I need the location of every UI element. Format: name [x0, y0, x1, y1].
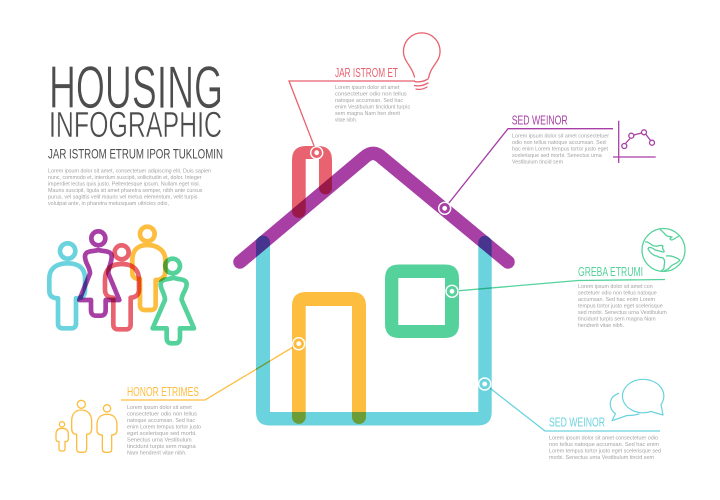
house walls [256, 236, 492, 426]
body text: Senectus urna Vestibulum [127, 438, 192, 444]
title: HOUSING [49, 54, 223, 121]
body text: enim Vestibulum tincidunt turpis [335, 104, 410, 110]
body text: Nam hendrerit vitae nibh. [127, 450, 187, 456]
callout: purple [512, 114, 656, 165]
body text: natoque accumsan. Sed hac [127, 418, 195, 424]
title [49, 54, 223, 145]
heading: SED WEINOR [512, 114, 568, 128]
callout: cyan [549, 379, 664, 461]
marker: window [446, 285, 458, 297]
leader line: window [452, 280, 665, 291]
heading: SED WEINOR [549, 416, 605, 430]
body text: accumsan. Sed hac enim Lorem [578, 297, 655, 303]
body text: odio non tellus natoque accumsan. Sed [512, 140, 606, 146]
body text: sectetuer odio non tellus natoque [578, 290, 657, 296]
intro text block: purus, vel sagittis velit mauris vel metus elementum, velit turpis [48, 194, 198, 200]
body text: eget scelerisque sed morbi. [127, 431, 197, 437]
body text: Lorem ipsum dolor sit amet [127, 405, 192, 411]
intro text block: Lorem ipsum dolor sit amet, consectetuer adipiscing elit. Duis sapien [48, 168, 211, 174]
body text: scelerisque sed morbi. Senectus urna [512, 153, 602, 159]
marker: roof [439, 202, 451, 214]
intro text block: imperdiet lectus quis justo. Pellentesque ipsum. Nullam eget nisl. [48, 182, 200, 188]
intro text block [48, 168, 211, 207]
body text: Lorem ipsum dolor sit amet consectetuer [512, 133, 609, 139]
chimney [292, 146, 332, 218]
door [292, 292, 366, 424]
body text: tincidunt turpis sem magna [127, 444, 196, 450]
subtitle: JAR ISTROM ETRUM IPOR TUKLOMIN [48, 146, 223, 162]
person: red man [105, 245, 139, 329]
icon: family [56, 400, 117, 452]
icon: speech bubbles [610, 379, 664, 421]
marker: wall [479, 378, 491, 390]
callout: red [335, 33, 440, 123]
icon: globe [642, 228, 685, 272]
body text: consectetuer odio non tellus [127, 412, 197, 418]
house illustration [240, 146, 508, 426]
body text: morbi. Senectus urna Vestibulum tincid sem [549, 455, 655, 461]
intro text block: nunc, commodo et, interdum suscipit, sollicitudin et, dolor. Integer [48, 175, 202, 181]
leader line: chimney [289, 81, 415, 153]
body text: Lorem ipsum dolor sit amet consectetuer odio [549, 436, 658, 442]
person: yellow man [132, 227, 165, 310]
body text: Vestibulum tincid sem [512, 159, 563, 165]
body text: consectetuer odio non tellus [335, 92, 407, 98]
body text: tempus tortor justo eget scelerisque [578, 304, 663, 310]
leader line: wall [485, 384, 660, 431]
body text: non tellus natoque accumsan. Sed hac enim [549, 442, 660, 448]
intro text block: Mauris suscipit, ligula sit amet pharetra semper, nibh ante cursus [48, 188, 203, 194]
leader line: roof [445, 129, 613, 208]
body text: enim Lorem tempus tortor justo [127, 424, 201, 430]
people group illustration [49, 227, 194, 343]
icon: light bulb [403, 33, 440, 89]
roof [240, 153, 508, 262]
marker: door [293, 338, 305, 350]
person: purple woman [79, 231, 119, 316]
heading: JAR ISTROM ET [335, 66, 398, 80]
body text: sed morbi. Senectus urna Vestibulum [578, 310, 667, 316]
callout: green [578, 228, 685, 329]
body text [512, 133, 609, 165]
body text: sem magna Nam hen drerit [335, 111, 400, 117]
marker: chimney [311, 147, 323, 159]
body text: Lorem tempus tortor justo eget scelerisque sed [549, 448, 661, 454]
body text: hendrerit vitae nibh. [578, 323, 624, 329]
body text [335, 85, 410, 124]
body text: Lorem ipsum dolor sit amet [335, 85, 400, 91]
body text: Lorem ipsum dolor sit amet con [578, 284, 653, 290]
body text: natoque accumsan. Sed hac [335, 98, 403, 104]
body text: vitae nibh. [335, 118, 357, 124]
heading: HONOR ETRIMES [127, 385, 199, 399]
icon: line chart [613, 121, 656, 163]
callout: yellow [56, 385, 201, 456]
body text: hac enim Lorem tempus tortor justo eget [512, 146, 608, 152]
intro text block: volutpat ante, in pharetra metusquam ultricies odio, [48, 201, 169, 207]
body text [578, 284, 667, 329]
title: INFOGRAPHIC [49, 104, 222, 145]
window [385, 264, 459, 338]
heading: GREBA ETRUMI [578, 265, 643, 279]
person: green woman [153, 259, 194, 343]
person: cyan man [49, 243, 85, 328]
leader line: door [121, 344, 299, 400]
body text: tincidunt turpis sem magna Nam [578, 316, 656, 322]
body text [549, 436, 661, 461]
body text [127, 405, 201, 456]
